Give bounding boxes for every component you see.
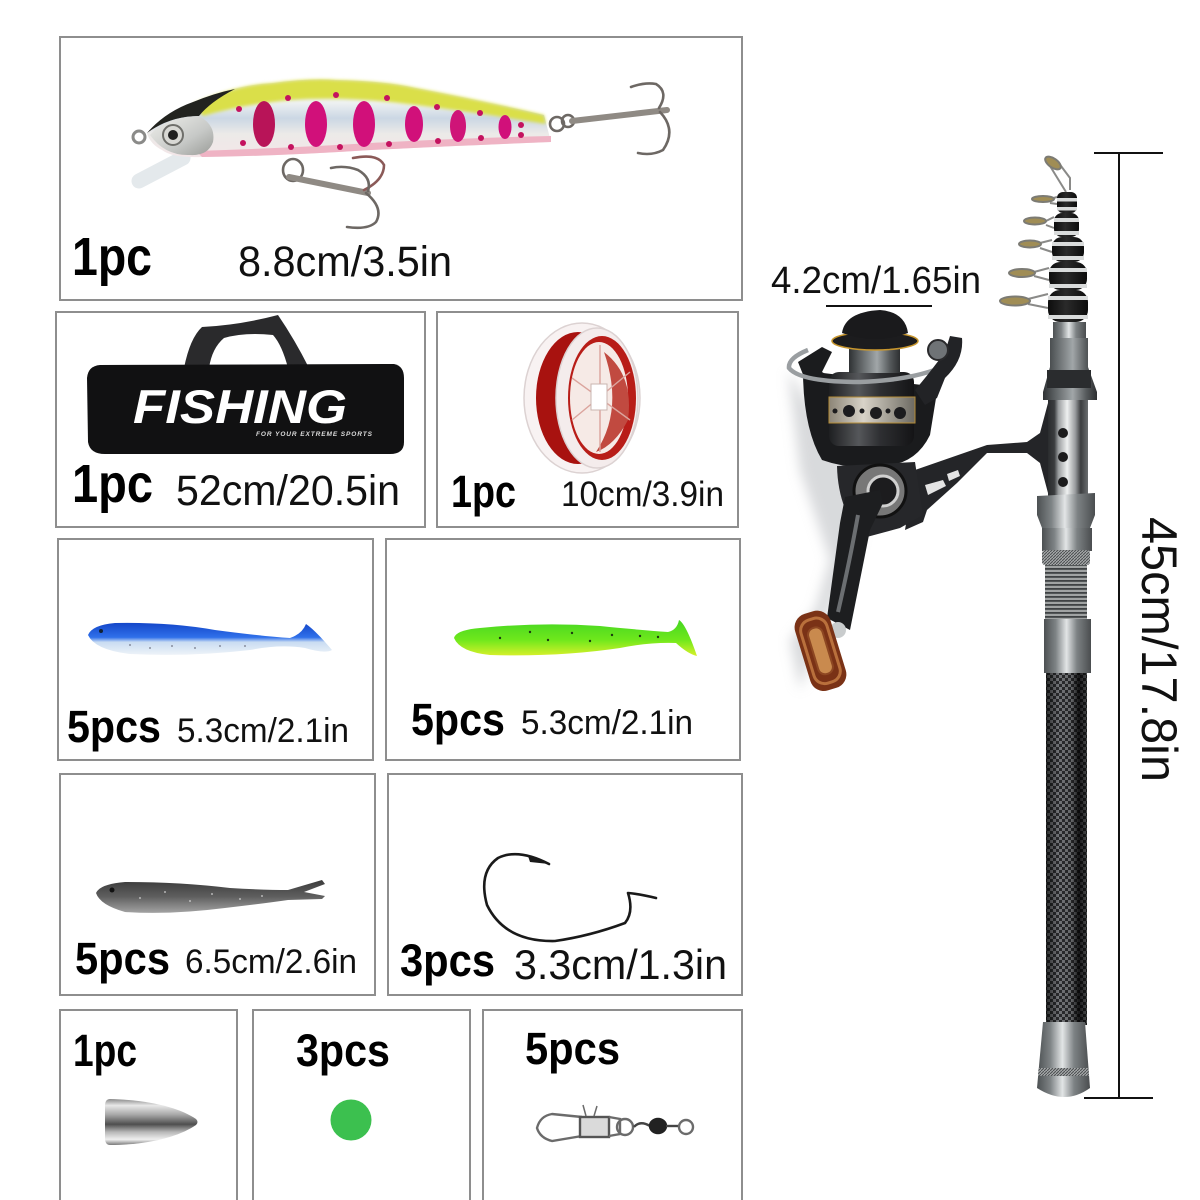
icon: telescopic rod [1000,154,1097,1097]
label: size: 5.3cm/2.1in [521,704,693,742]
crank handle [827,490,883,630]
spool neck [849,345,900,373]
icon: silver soft lure [96,880,325,913]
panel: fishing line [437,312,738,527]
icon: green soft lure [454,620,697,656]
label: size: 52cm/20.5in [176,467,400,515]
gear housing [837,462,923,538]
knurled ring [1042,550,1090,565]
carbon shaft [1046,673,1087,1025]
rod tip guides [1000,154,1070,308]
label: quantity: 5pcs [67,701,161,752]
perforated band [829,397,915,423]
panel: minnow lure [60,37,742,300]
foot arm [905,403,1048,530]
handle tip [830,622,846,638]
panel: silver soft lure [60,774,375,995]
spool body [829,372,914,446]
frame [803,372,937,467]
label: reel width: 4.2cm/1.65in [771,260,981,302]
belly treble hook [283,157,384,228]
left bail arm [798,347,832,382]
lower collar [1037,493,1095,528]
icon: spinning reel [788,310,1048,695]
collar [1043,338,1097,400]
icon: snap swivel [537,1105,693,1141]
gear ring [854,465,906,517]
silver ferrule [1053,322,1086,340]
bail wire [789,350,947,382]
icon: black bag: FOR YOUR EXTREME SPORTS [256,431,373,438]
label: size: 5.3cm/2.1in [177,712,349,750]
spool cap [842,310,908,339]
panel: beads [253,1010,470,1200]
bail arm [915,336,962,405]
silver sleeve [1044,619,1091,673]
line roller [928,340,948,360]
rod tip sections [1048,192,1088,322]
seat holes [1058,428,1068,487]
label: quantity: 5pcs [525,1023,620,1074]
label: quantity: 1pc [72,227,152,287]
icon: offset worm hook [484,854,656,941]
reel shadow [788,370,860,690]
label: quantity: 1pc [72,454,153,514]
icon: black bag [87,315,404,454]
panel: bullet weight [60,1010,237,1200]
dimension: rod length: 45cm/17.8in [1131,517,1187,782]
label: size: 6.5cm/2.6in [185,943,357,981]
rear treble hook [550,83,669,154]
label: size: 3.3cm/1.3in [514,941,727,988]
label: size: 8.8cm/3.5in [238,238,452,286]
label: size: 10cm/3.9in [561,475,724,514]
wood knob [791,607,850,695]
panel: worm hook [388,774,742,995]
icon: green bead [330,1100,372,1140]
label: quantity: 1pc [451,466,516,517]
label: quantity: 3pcs [296,1025,390,1076]
butt cap [1037,1022,1090,1097]
panel: carry bag [56,312,425,527]
icon: bullet weight [105,1099,198,1145]
panel: blue soft lure [58,539,373,760]
icon: minnow lure [133,79,669,228]
label: quantity: 1pc [73,1025,137,1076]
icon: line spool [524,323,640,473]
panel: green soft lure [386,539,740,760]
spool flange [832,332,918,350]
label: quantity: 5pcs [411,694,505,745]
icon: blue soft lure [88,623,332,655]
reel seat [1048,400,1088,498]
threaded section [1045,565,1087,619]
panel: swivels [483,1010,742,1200]
label: quantity: 3pcs [400,935,495,986]
label: quantity: 5pcs [75,933,170,984]
icon: black bag: FISHING [133,380,347,433]
